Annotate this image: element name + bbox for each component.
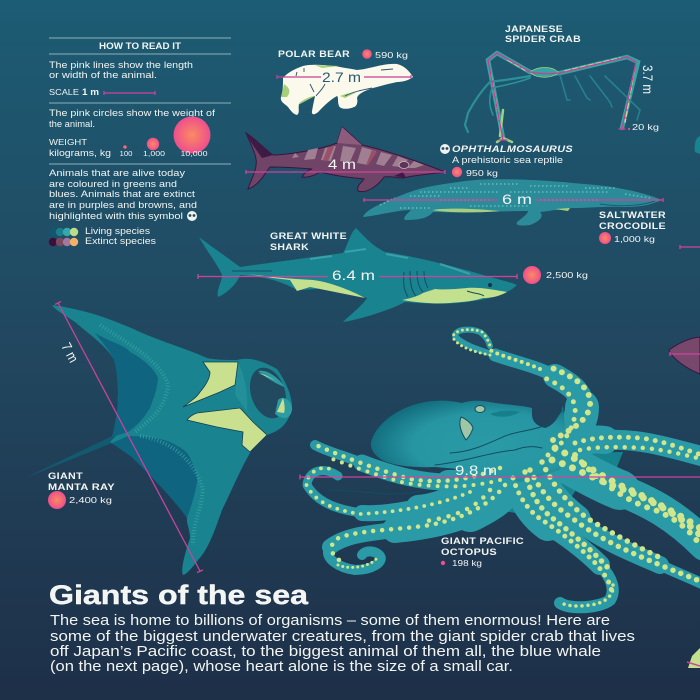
label: polar bear: 590 kg <box>375 50 408 60</box>
colour key: living species <box>49 226 151 236</box>
living versus extinct explanation: are coloured in greens and <box>49 179 177 189</box>
scale bar <box>49 87 155 97</box>
weight scale: 100 <box>120 149 132 158</box>
octopus suckers <box>306 330 700 606</box>
label: giant manta ray: MANTA RAY <box>48 482 115 493</box>
weight: great white shark <box>523 266 588 284</box>
length line: 3.7 m <box>488 53 656 140</box>
label: ophthalmosaurus: A prehistoric sea reptile <box>452 155 563 165</box>
label: saltwater crocodile: 1,000 kg <box>614 234 655 244</box>
legend heading: HOW TO READ IT <box>99 41 182 51</box>
animal: saltwater crocodile <box>363 179 666 244</box>
weight explanation: The pink circles show the weight of <box>49 108 216 118</box>
animal: polar bear <box>277 49 413 115</box>
octopus head <box>371 401 566 482</box>
weight explanation: the animal. <box>49 119 95 129</box>
length line: 2.7 m: 2.7 m <box>322 69 361 85</box>
length line: 7 m <box>55 302 203 572</box>
label: giant pacific octopus: OCTOPUS <box>441 547 497 558</box>
label: ophthalmosaurus: 950 kg <box>466 168 498 178</box>
living versus extinct explanation: Animals that are alive today <box>49 168 185 178</box>
length line: 6.4 m: 6.4 m <box>332 267 375 283</box>
intro text: some of the biggest underwater creatures, from the giant spider crab that lives <box>50 629 635 645</box>
label: saltwater crocodile <box>599 210 666 244</box>
label: giant pacific octopus: 198 kg <box>452 558 482 568</box>
length line: 9.8 m <box>300 463 700 479</box>
label: saltwater crocodile: CROCODILE <box>599 221 666 232</box>
animal: giant pacific octopus <box>300 330 700 607</box>
label: Japanese spider crab <box>505 24 659 132</box>
octopus webbing <box>485 452 623 514</box>
colour key: extinct species <box>49 236 157 246</box>
weight scale: kilograms, kg <box>49 148 111 158</box>
animal: giant manta ray <box>25 302 292 575</box>
length line: 6 m: 6 m <box>502 191 532 207</box>
living versus extinct explanation: are in purples and browns, and <box>49 200 197 210</box>
edge fragment: length line at right <box>680 245 700 249</box>
colour key: extinct species: Extinct species <box>85 236 157 246</box>
length explanation: or width of the animal. <box>49 70 157 80</box>
label: great white shark: GREAT WHITE <box>270 231 347 242</box>
length line: 4 m <box>246 156 445 174</box>
length line: 6.4 m <box>198 267 517 283</box>
weight scale: WEIGHT <box>49 137 88 147</box>
label: saltwater crocodile: SALTWATER <box>599 210 666 221</box>
weight scale <box>49 116 210 158</box>
length explanation: The pink lines show the length <box>49 60 193 70</box>
length line: 9.8 m: 9.8 m <box>455 463 497 478</box>
label: polar bear: POLAR BEAR <box>278 49 350 60</box>
label: polar bear <box>278 49 408 60</box>
label: great white shark <box>270 231 347 253</box>
length line: 6 m <box>364 191 663 207</box>
edge fragment: animal at right, teal <box>695 136 700 154</box>
animal: ophthalmosaurus <box>246 127 573 192</box>
label: giant manta ray <box>48 471 115 509</box>
weight scale: 10,000 <box>180 149 208 158</box>
label: giant pacific octopus: GIANT PACIFIC <box>441 536 524 547</box>
weight scale: 1,000 <box>143 149 165 158</box>
intro text: The sea is home to billions of organisms – some of them enormous! Here are <box>50 613 610 629</box>
label: giant manta ray: GIANT <box>48 471 83 482</box>
title: Giants of the sea <box>49 580 309 610</box>
length explanation <box>49 60 193 80</box>
edge fragment: purple animal at right <box>669 337 700 374</box>
panel: how to read it <box>49 38 231 246</box>
label: Japanese spider crab: JAPANESE <box>505 24 563 35</box>
edge fragment: teal animal bottom right <box>687 648 700 668</box>
length line: 3.7 m: 3.7 m <box>640 65 656 94</box>
intro text <box>50 613 635 675</box>
label: great white shark: SHARK <box>270 242 309 253</box>
living versus extinct explanation <box>49 168 197 221</box>
living versus extinct explanation: highlighted with this symbol <box>49 211 183 221</box>
label: ophthalmosaurus <box>440 144 573 178</box>
label: ophthalmosaurus: OPHTHALMOSAURUS <box>452 144 573 155</box>
label: Japanese spider crab: 20 kg <box>632 122 659 132</box>
animal: Japanese spider crab <box>465 24 659 142</box>
octopus arms <box>307 330 700 607</box>
intro text: (on the next page), whose heart alone is the size of a small car. <box>50 659 513 675</box>
label: giant pacific octopus <box>441 536 524 568</box>
length line: 4 m: 4 m <box>328 156 356 172</box>
intro text: off Japan’s Pacific coast, to the biggest animal of them all, the blue whale <box>50 644 601 660</box>
colour key: living species: Living species <box>85 226 151 236</box>
animal: great white shark <box>198 228 588 322</box>
living versus extinct explanation: blues. Animals that are extinct <box>49 189 196 199</box>
length line: 7 m: 7 m <box>58 340 82 365</box>
scale bar: SCALE <box>49 87 79 97</box>
scale bar: 1 m <box>82 87 99 97</box>
weight explanation <box>49 108 216 129</box>
label: Japanese spider crab: SPIDER CRAB <box>505 34 581 45</box>
label: giant manta ray: 2,400 kg <box>69 495 112 505</box>
weight: great white shark: 2,500 kg <box>546 270 588 280</box>
